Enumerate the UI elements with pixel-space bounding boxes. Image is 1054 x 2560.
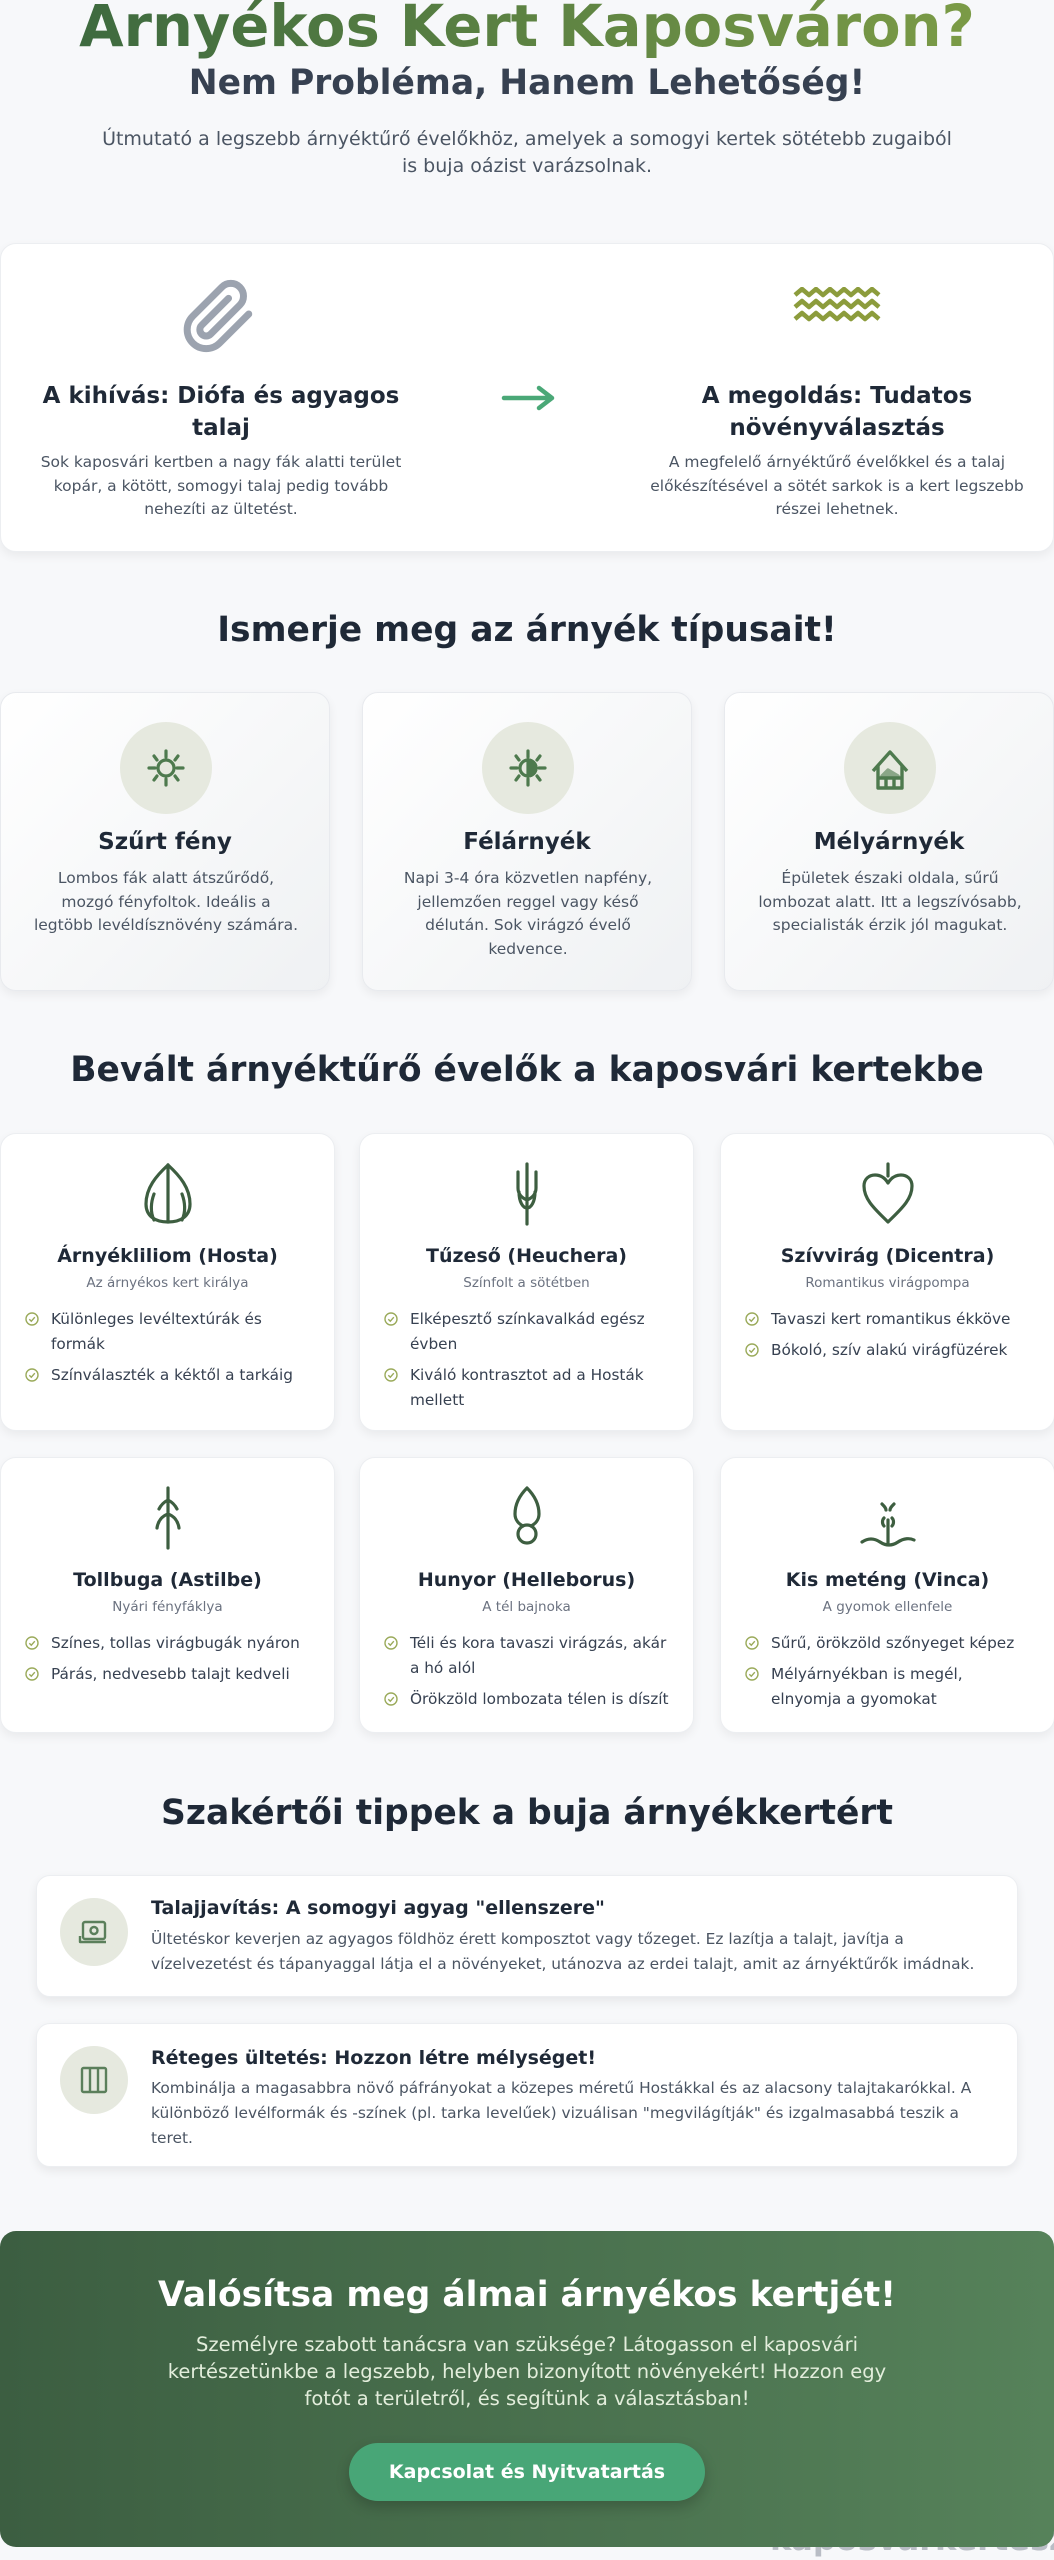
text: challenge: Sok kaposvári kertben a nagy fák alatti terület kopár, a kötött, somogyi talaj pedig tovább nehezíti az ültetést.: [41, 453, 401, 518]
panel: partial shade: [362, 692, 692, 991]
button: [349, 2443, 705, 2501]
panel: heuchera: Elképesztő színkavalkád egész évben: [410, 1310, 645, 1353]
panel: astilbe: Tollbuga (Astilbe): [73, 1569, 262, 1591]
icon: bud: [513, 1486, 541, 1545]
heading: expert tips: Szakértői tippek a buja árnyékkertért: [161, 1793, 893, 1833]
panel: filtered light: Lombos fák alatt átszűrődő, mozgó fényfoltok. Ideális a legtöbb levéldísznövény számára.: [34, 869, 298, 934]
panel: dicentra: [720, 1133, 1054, 1431]
heading: solution: A megoldás: Tudatos növényválasztás: [702, 383, 972, 441]
panel: heuchera: Kiváló kontrasztot ad a Hosták mellett: [410, 1366, 644, 1409]
panel: filtered light: [0, 692, 330, 991]
heading: challenge: A kihívás: Diófa és agyagos talaj: [43, 383, 399, 441]
panel: helleborus: Hunyor (Helleborus): [418, 1569, 635, 1591]
panel: helleborus: Téli és kora tavaszi virágzás, akár a hó alól: [410, 1634, 666, 1677]
icon: paperclip: [184, 280, 252, 352]
panel: hosta: Színválaszték a kéktől a tarkáig: [51, 1366, 293, 1384]
panel: hosta: Az árnyékos kert királya: [86, 1275, 249, 1291]
panel: tip layering: Kombinálja a magasabbra növő páfrányokat a közepes méretű Hostákkal és az alacsony talajtakarókkal. A különböző levélformák és -színek (pl. tarka levelűek) vizuálisan "megvilágítják" és izgalmasabbá teszik a teret.: [151, 2079, 971, 2147]
cta text: Személyre szabott tanácsra van szüksége? Látogasson el kaposvári kertészetünkbe a legszebb, helyben bizonyított növényekért! Hozzon egy fotót a területről, és segítünk a választásban!: [168, 2333, 886, 2410]
panel: heuchera: [359, 1133, 694, 1431]
panel: call to action: [0, 2231, 1054, 2547]
panel: hosta: Árnyékliliom (Hosta): [57, 1245, 278, 1267]
subtitle: Nem Probléma, Hanem Lehetőség!: [189, 63, 865, 103]
icon: soil: [60, 1898, 128, 1966]
panel: hosta: [0, 1133, 335, 1431]
heading: shade types: Ismerje meg az árnyék típusait!: [217, 610, 837, 650]
cta heading: Valósítsa meg álmai árnyékos kertjét!: [158, 2275, 896, 2315]
panel: helleborus: A tél bajnoka: [482, 1599, 571, 1615]
panel: deep shade: Épületek északi oldala, sűrű lombozat alatt. Itt a legszívósabb, specialisták érzik jól magukat.: [758, 869, 1022, 934]
panel: helleborus: Örökzöld lombozata télen is díszít: [410, 1690, 669, 1708]
panel: tip soil: [36, 1875, 1018, 1997]
panel: dicentra: Tavaszi kert romantikus ékköve: [771, 1310, 1010, 1328]
icon: heart: [862, 1162, 914, 1224]
panel: dicentra: Bókoló, szív alakú virágfüzérek: [771, 1341, 1007, 1359]
panel: dicentra: Romantikus virágpompa: [805, 1275, 970, 1291]
panel: filtered light: Szűrt fény: [98, 829, 232, 855]
panel: tip soil: Talajjavítás: A somogyi agyag "ellenszere": [151, 1897, 605, 1919]
panel: tip layering: Réteges ültetés: Hozzon létre mélységet!: [151, 2047, 596, 2069]
panel: vinca: Kis meténg (Vinca): [786, 1569, 989, 1591]
panel: challenge and solution: [0, 243, 1054, 552]
icon: plume: [155, 1486, 181, 1550]
icon: heuchera: [516, 1162, 538, 1226]
button: Kapcsolat és Nyitvatartás: [389, 2461, 665, 2483]
panel: astilbe: Párás, nedvesebb talajt kedveli: [51, 1665, 290, 1683]
icon: waves: [794, 287, 880, 322]
panel: hosta: Különleges levéltextúrák és formák: [51, 1310, 262, 1353]
arrow: [502, 386, 554, 410]
panel: partial shade: Napi 3-4 óra közvetlen napfény, jellemzően reggel vagy késő délután. Sok virágzó évelő kedvence.: [404, 869, 652, 958]
panel: vinca: Mélyárnyékban is megél, elnyomja a gyomokat: [771, 1665, 963, 1708]
panel: deep shade: Mélyárnyék: [814, 829, 964, 855]
panel: tip soil: Ültetéskor keverjen az agyagos földhöz érett komposztot vagy tőzeget. Ez lazítja a talajt, javítja a vízelvezetést és tápanyaggal látja el a növényeket, utánozva az erdei talajt, amit az árnyéktűrők imádnak.: [151, 1930, 974, 1973]
icon: sun: [120, 722, 212, 814]
panel: astilbe: [0, 1457, 335, 1733]
heading: plants: Bevált árnyéktűrő évelők a kaposvári kertekbe: [70, 1050, 984, 1090]
panel: tip layering: [36, 2023, 1018, 2167]
panel: vinca: [720, 1457, 1054, 1733]
panel: vinca: A gyomok ellenfele: [823, 1599, 952, 1615]
icon: leaf: [144, 1163, 192, 1224]
panel: helleborus: [359, 1457, 694, 1733]
panel: heuchera: Tűzeső (Heuchera): [426, 1245, 627, 1267]
panel: deep shade: [724, 692, 1054, 991]
panel: vinca: Sűrű, örökzöld szőnyeget képez: [771, 1634, 1014, 1652]
panel: dicentra: Szívvirág (Dicentra): [781, 1245, 994, 1267]
icon: groundcover: [860, 1502, 916, 1547]
intro text: Útmutató a legszebb árnyéktűrő évelőkhöz, amelyek a somogyi kertek sötétebb zugaiból is buja oázist varázsolnak.: [102, 128, 952, 177]
panel: astilbe: Nyári fényfáklya: [112, 1599, 223, 1615]
panel: partial shade: Félárnyék: [463, 829, 591, 855]
icon: half sun: [482, 722, 574, 814]
text: solution: A megfelelő árnyéktűrő évelőkkel és a talaj előkészítésével a sötét sarkok is a kert legszebb részei lehetnek.: [650, 453, 1024, 518]
icon: house: [844, 722, 936, 814]
icon: layers: [60, 2046, 128, 2114]
panel: astilbe: Színes, tollas virágbugák nyáron: [51, 1634, 300, 1652]
panel: heuchera: Színfolt a sötétben: [463, 1275, 590, 1291]
